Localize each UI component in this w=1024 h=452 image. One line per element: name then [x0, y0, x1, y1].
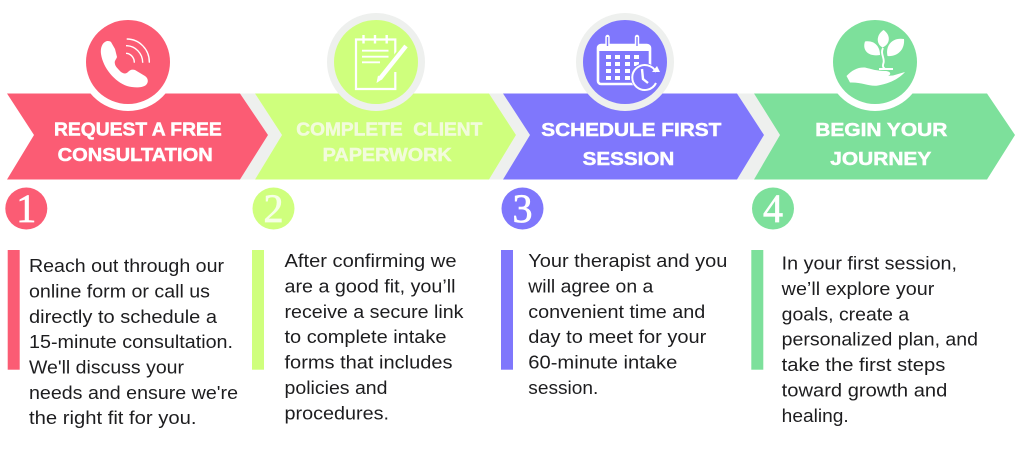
description 4: take the first steps — [782, 355, 945, 375]
description 2: procedures. — [284, 403, 389, 423]
panel: step 3 schedule first session — [501, 13, 764, 398]
description 3: convenient time and — [528, 302, 705, 322]
number badge 2 — [252, 186, 294, 231]
heading 4: BEGIN YOUR — [815, 119, 947, 140]
connector band: step 3 to 4 — [737, 94, 780, 180]
description 2: forms that includes — [284, 353, 452, 373]
description 4: goals, create a — [782, 304, 910, 324]
number badge 3: 3 — [512, 186, 532, 231]
heading 3: SESSION — [583, 148, 674, 169]
description 1 — [29, 256, 238, 428]
description 4: In your first session, — [782, 254, 957, 274]
arrow banner 4 — [754, 94, 1015, 180]
accent bar 4 — [751, 250, 763, 370]
icon ring 4 — [826, 13, 924, 111]
number badge 4 — [752, 186, 794, 231]
heading 3: SCHEDULE FIRST — [541, 119, 722, 140]
icon ring 1 — [79, 13, 177, 111]
arrow banner 3 — [503, 94, 764, 180]
description 2: After confirming we — [284, 251, 456, 271]
heading 1 — [54, 119, 222, 165]
number badge 2: 2 — [264, 186, 284, 231]
description 1: the right fit for you. — [29, 408, 196, 428]
accent bar 2 — [252, 250, 264, 370]
description 1: directly to schedule a — [29, 307, 218, 327]
description 2 — [284, 251, 465, 423]
heading 1: REQUEST A FREE — [54, 119, 222, 140]
icon: calendar and clock — [583, 20, 667, 104]
panel: step 4 begin your journey — [751, 13, 1015, 426]
number badge 3 — [502, 186, 544, 231]
description 3: session. — [528, 378, 598, 398]
description 3: Your therapist and you — [528, 251, 727, 271]
description 3 — [527, 251, 727, 398]
description 1: 15-minute consultation. — [29, 332, 233, 352]
connector band: step 1 to 2 — [240, 94, 282, 180]
heading 1: CONSULTATION — [58, 144, 213, 165]
number badge 1: 1 — [16, 186, 36, 231]
connector band: step 2 to 3 — [489, 94, 530, 180]
number badge 1 — [5, 186, 47, 231]
description 2: are a good fit, you’ll — [284, 276, 456, 296]
accent bar 3 — [501, 250, 513, 370]
description 4: toward growth and — [782, 380, 947, 400]
description 3: 60-minute intake — [528, 353, 677, 373]
description 4: healing. — [782, 406, 849, 426]
icon: notepad and pencil — [334, 20, 418, 104]
description 1: Reach out through our — [29, 256, 224, 276]
description 1: needs and ensure we're — [29, 383, 238, 403]
description 3: will agree on a — [527, 276, 654, 296]
description 1: We'll discuss your — [29, 358, 184, 378]
accent bar 1 — [8, 250, 20, 370]
arrow banner 2 — [255, 94, 516, 180]
description 2: receive a secure link — [284, 302, 465, 322]
heading 2: PAPERWORK — [323, 144, 452, 165]
arrow banner 1 — [7, 94, 268, 180]
heading 4: JOURNEY — [830, 148, 932, 169]
description 2: to complete intake — [284, 327, 446, 347]
description 4: we’ll explore your — [781, 279, 934, 299]
description 4: personalized plan, and — [782, 330, 978, 350]
icon: phone — [86, 20, 170, 104]
heading 3 — [541, 119, 722, 169]
panel: step 2 complete client paperwork — [252, 13, 516, 423]
description 4 — [781, 254, 978, 426]
description 3: day to meet for your — [528, 327, 706, 347]
heading 2: COMPLETE CLIENT — [296, 119, 483, 140]
icon ring 3 — [576, 13, 674, 111]
heading 2 — [296, 119, 483, 165]
icon: hand holding seedling — [833, 20, 917, 104]
panel: step 1 request a free consultation — [5, 13, 268, 428]
icon ring 2 — [327, 13, 425, 111]
description 1: online form or call us — [29, 281, 210, 301]
description 2: policies and — [284, 378, 388, 398]
number badge 4: 4 — [763, 186, 783, 231]
heading 4 — [815, 119, 947, 169]
